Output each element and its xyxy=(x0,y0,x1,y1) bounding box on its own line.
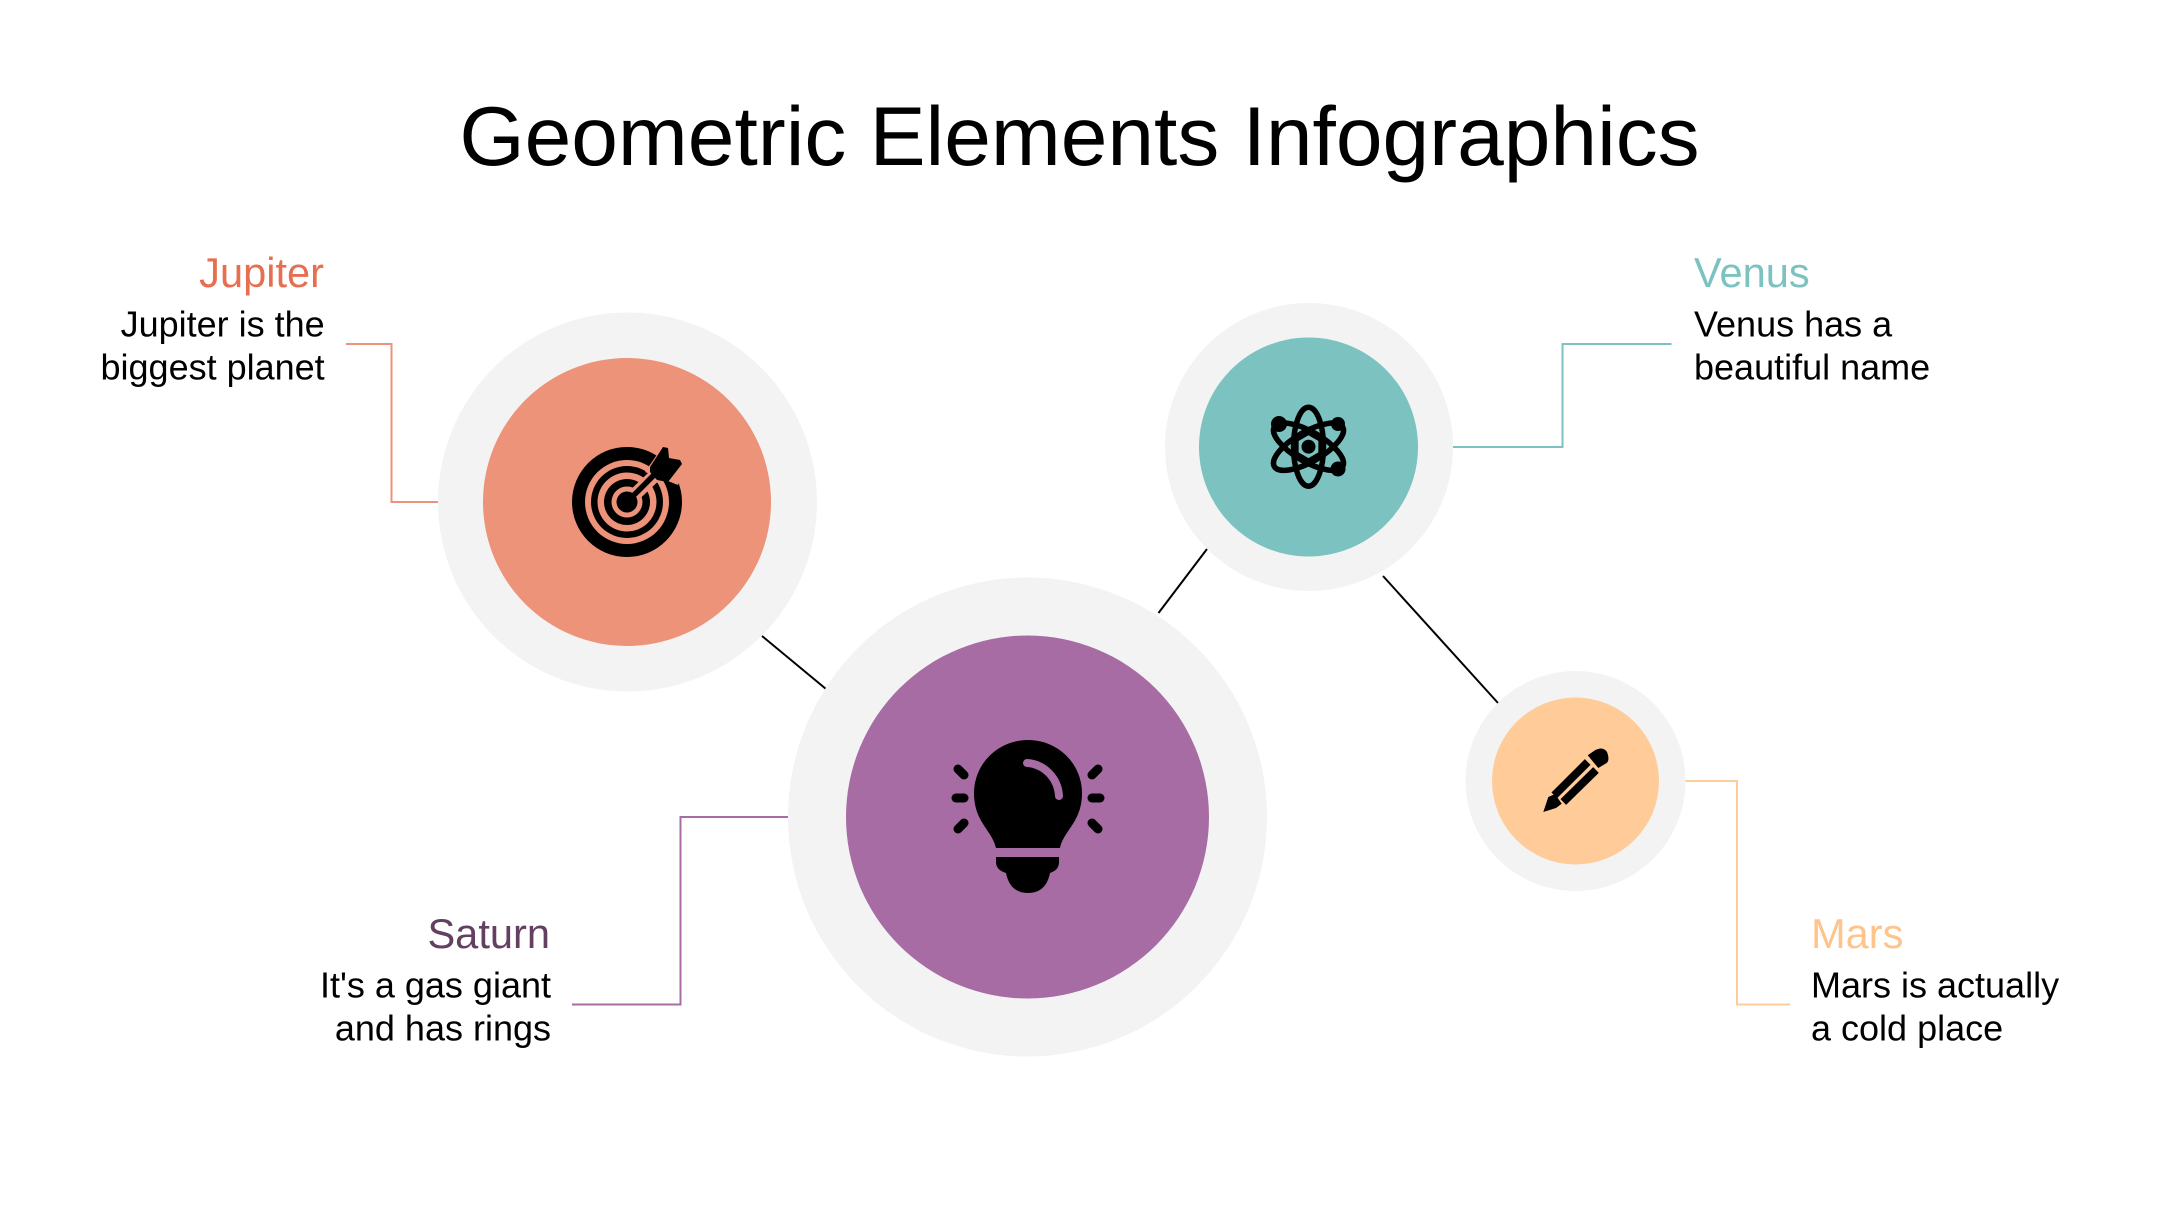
callout line: Venus xyxy=(1453,344,1672,447)
text block: Saturn xyxy=(320,910,551,1048)
text block: Mars xyxy=(1811,910,2059,1048)
text block: Saturn: and has rings xyxy=(335,1007,551,1048)
panel: Saturn circle xyxy=(788,578,1267,1056)
text block: Jupiter: Jupiter is the xyxy=(121,303,325,344)
panel: Jupiter circle xyxy=(438,312,817,692)
text block: Jupiter: Jupiter xyxy=(199,249,324,296)
text block: Jupiter xyxy=(101,249,325,387)
panel: Mars circle xyxy=(1466,671,1686,891)
icon: target with arrow xyxy=(572,443,686,557)
text block: Jupiter: biggest planet xyxy=(101,346,325,387)
icon: atom xyxy=(1267,407,1350,486)
text block: Saturn: Saturn xyxy=(427,910,550,957)
text block: Venus: Venus has a xyxy=(1694,303,1893,344)
callout line: Mars xyxy=(1685,781,1790,1004)
text block: Venus: Venus xyxy=(1694,249,1810,296)
text block: Mars: Mars xyxy=(1811,910,1903,957)
icon: pencil xyxy=(1543,749,1608,812)
icon: light bulb xyxy=(956,740,1100,893)
panel: Venus circle xyxy=(1165,303,1453,591)
callout line: Saturn xyxy=(572,817,789,1004)
text block: Venus xyxy=(1694,249,1930,387)
callout line: Jupiter xyxy=(346,344,438,502)
connector lines between circles xyxy=(762,549,1498,703)
text block: Venus: beautiful name xyxy=(1694,346,1930,387)
title: Geometric Elements Infographics xyxy=(459,89,1700,183)
text block: Mars: a cold place xyxy=(1811,1007,2003,1048)
text block: Saturn: It's a gas giant xyxy=(320,964,551,1005)
text block: Mars: Mars is actually xyxy=(1811,964,2059,1005)
